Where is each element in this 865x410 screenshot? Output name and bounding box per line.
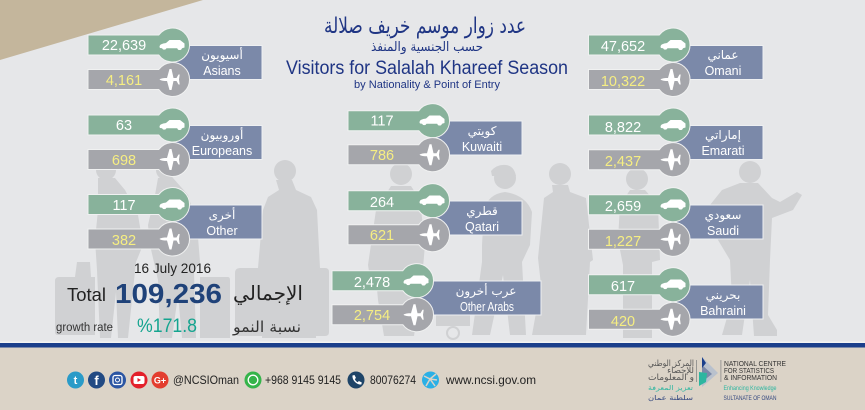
panel: Asians: 4,161	[106, 73, 142, 89]
panel: Emarati	[588, 108, 763, 177]
panel: Qatari	[348, 184, 522, 252]
panel: Omani: Omani	[705, 64, 741, 78]
logo Arabic name: للإحصاء	[667, 366, 694, 376]
toll free number: 80076274	[370, 373, 416, 387]
panel: Qatari: 264	[370, 195, 394, 211]
title block	[286, 14, 568, 91]
panel: Bahraini	[588, 268, 763, 336]
icon: twitter: t	[74, 375, 78, 387]
panel: Other Arabs: Other Arabs	[460, 300, 514, 314]
total block	[56, 261, 303, 337]
logo Arabic name	[648, 359, 694, 383]
panel: Saudi: سعودي	[705, 208, 741, 223]
panel: Other: 117	[112, 198, 136, 214]
panel: Other Arabs: 2,754	[354, 308, 390, 324]
total label: Total	[67, 285, 106, 305]
logo Arabic country: سلطنة عمان	[648, 394, 693, 402]
icon: facebook: f	[94, 373, 99, 388]
panel: Saudi	[588, 188, 763, 256]
panel: Omani: عماني	[707, 48, 739, 62]
icon: whatsapp	[244, 372, 262, 388]
panel: Asians: أسيويون	[201, 47, 243, 63]
date: 16 July 2016	[134, 261, 211, 276]
decorative tan corner	[0, 0, 203, 60]
panel: Emarati: إماراتي	[705, 128, 741, 143]
panel: Kuwaiti: 117	[370, 114, 394, 130]
total value: 109,236	[115, 278, 222, 309]
logo emblem	[699, 357, 718, 387]
logo English name: FOR STATISTICS	[724, 368, 774, 375]
panel: Other: 382	[112, 233, 136, 249]
silhouettes of travellers	[55, 160, 802, 339]
English subtitle: by Nationality & Point of Entry	[354, 79, 500, 91]
panel: Asians: Asians	[203, 64, 241, 78]
panel: Asians	[88, 28, 262, 96]
icon: google plus	[152, 372, 168, 388]
logo Arabic name: و المعلومات	[648, 373, 694, 383]
logo English name: NATIONAL CENTRE	[724, 361, 786, 368]
panel: Kuwaiti	[348, 104, 522, 172]
panel: Bahraini: 420	[611, 314, 635, 330]
panel: Qatari: Qatari	[465, 220, 499, 234]
panel: Emarati: Emarati	[701, 144, 745, 158]
whatsapp number: +968 9145 9145	[265, 373, 341, 387]
logo slogan: Enhancing Knowledge	[724, 385, 777, 392]
footer	[0, 342, 865, 410]
panel: Other: أخرى	[209, 207, 235, 223]
logo English name	[724, 361, 786, 382]
icon: twitter	[67, 372, 84, 388]
panel: Other: Other	[206, 224, 238, 238]
English title: Visitors for Salalah Khareef Season	[286, 58, 568, 79]
icon: facebook	[88, 372, 105, 388]
panel: Europeans	[88, 108, 262, 176]
panel: Other Arabs: عرب أخرون	[456, 283, 516, 299]
panel: Omani: 47,652	[601, 39, 645, 55]
panel: Emarati: 2,437	[605, 154, 641, 170]
panel: Qatari: قطري	[466, 204, 498, 219]
panel: Emarati: 8,822	[605, 120, 641, 136]
panel: Bahraini: 617	[611, 279, 635, 295]
website: www.ncsi.gov.om	[445, 373, 536, 387]
panel: Qatari: 621	[370, 228, 394, 244]
panel: Kuwaiti: 786	[370, 148, 394, 164]
panel: Asians: 22,639	[102, 38, 146, 54]
icon: phone	[348, 372, 364, 388]
panel: Omani: 10,322	[601, 74, 645, 90]
icon: globe	[422, 372, 439, 388]
panel: Europeans: 698	[112, 153, 136, 169]
panel: Saudi: 2,659	[605, 199, 641, 215]
growth value: %171.8	[137, 316, 197, 337]
panel: Kuwaiti: Kuwaiti	[462, 140, 502, 154]
logo English name: & INFORMATION	[724, 375, 777, 382]
growth label: growth rate	[56, 322, 113, 334]
Arabic title: عدد زوار موسم خريف صلالة	[324, 14, 526, 39]
logo Arabic name: المركز الوطني	[648, 359, 694, 369]
panel: Kuwaiti: كويتي	[468, 124, 497, 139]
panel: Omani	[588, 28, 763, 96]
panel: Saudi: Saudi	[707, 224, 739, 238]
panel: Europeans: Europeans	[192, 144, 252, 158]
icon: youtube	[130, 372, 148, 388]
panel: Bahraini: بحريني	[706, 288, 740, 303]
panel: Europeans: أوروبيون	[201, 127, 243, 143]
NCSI logo	[648, 357, 786, 402]
total Arabic label: الإجمالي	[233, 281, 303, 306]
panel: Other	[88, 188, 262, 256]
icon: instagram	[109, 372, 126, 388]
handle: @NCSIOman	[173, 373, 239, 387]
logo country: SULTANATE OF OMAN	[724, 396, 776, 402]
growth Arabic label: نسبة النمو	[232, 318, 301, 336]
logo Arabic slogan: تعزيز المعرفة	[648, 384, 693, 392]
panel: Other Arabs	[332, 264, 541, 332]
panel: Bahraini: Bahraini	[700, 304, 746, 318]
panel: Other Arabs: 2,478	[354, 275, 390, 291]
icon: google plus: G+	[154, 376, 166, 386]
panel: Europeans: 63	[116, 118, 132, 134]
Arabic subtitle: حسب الجنسية والمنفذ	[371, 40, 483, 55]
panel: Saudi: 1,227	[605, 234, 641, 250]
